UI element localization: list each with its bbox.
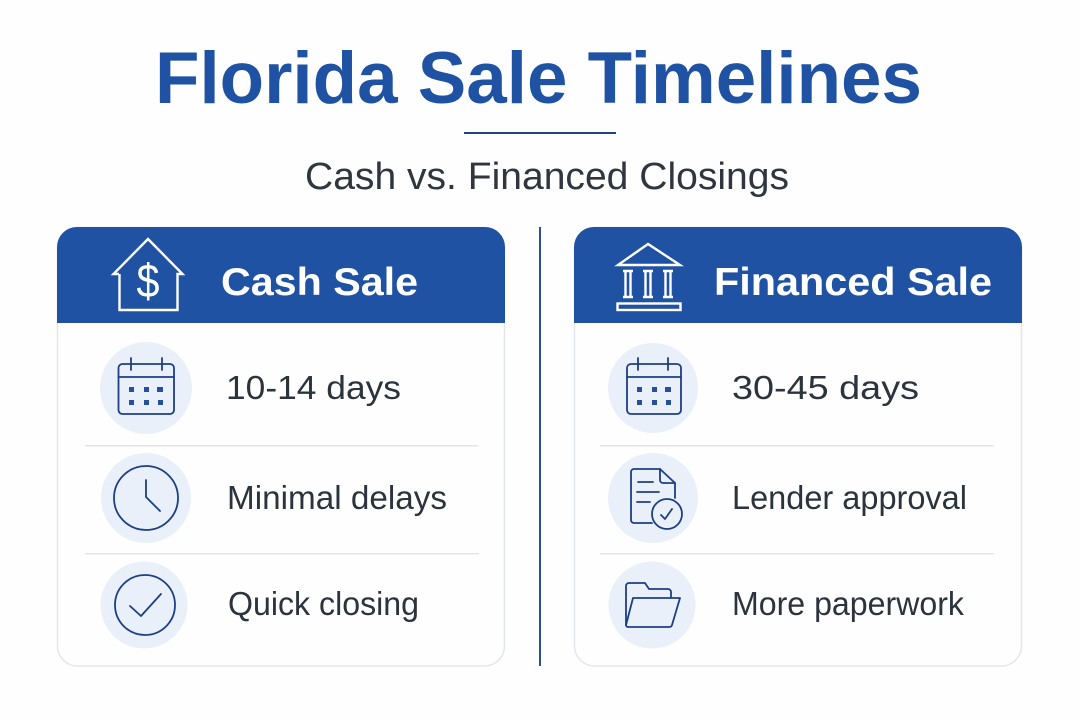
icon: folder (608, 562, 696, 648)
header band (574, 227, 1022, 323)
card body (574, 228, 1022, 666)
row: 30-45 days (608, 343, 919, 433)
card body (58, 228, 504, 666)
panel: cash sale (57, 227, 505, 666)
row: minimal delays (101, 453, 447, 543)
icon: check circle (100, 562, 188, 648)
row: 10-14 days (100, 342, 401, 434)
icon: clock (101, 453, 191, 543)
row: lender approval (608, 453, 967, 543)
label: 10-14 days (226, 369, 401, 406)
label: 30-45 days (732, 369, 919, 406)
header band (57, 227, 505, 323)
label: Quick closing (228, 585, 419, 622)
icon: house with dollar: $ (136, 254, 160, 307)
row: quick closing (100, 562, 419, 648)
icon: calendar (100, 342, 192, 434)
icon: bank (618, 244, 680, 310)
row: more paperwork (608, 562, 964, 648)
title underline (464, 132, 616, 134)
label: Minimal delays (227, 479, 447, 516)
subtitle: Cash vs. Financed Closings (305, 156, 789, 198)
label: Lender approval (732, 479, 967, 516)
icon: calendar (608, 343, 698, 433)
label: More paperwork (732, 585, 964, 622)
title: Florida Sale Timelines (155, 38, 922, 119)
panel: financed sale (574, 227, 1022, 666)
heading: cash sale: Cash Sale (221, 261, 418, 304)
heading: financed sale: Financed Sale (714, 261, 992, 304)
center divider (539, 227, 541, 666)
icon: house with dollar (114, 239, 182, 310)
icon: document with check (608, 453, 698, 543)
